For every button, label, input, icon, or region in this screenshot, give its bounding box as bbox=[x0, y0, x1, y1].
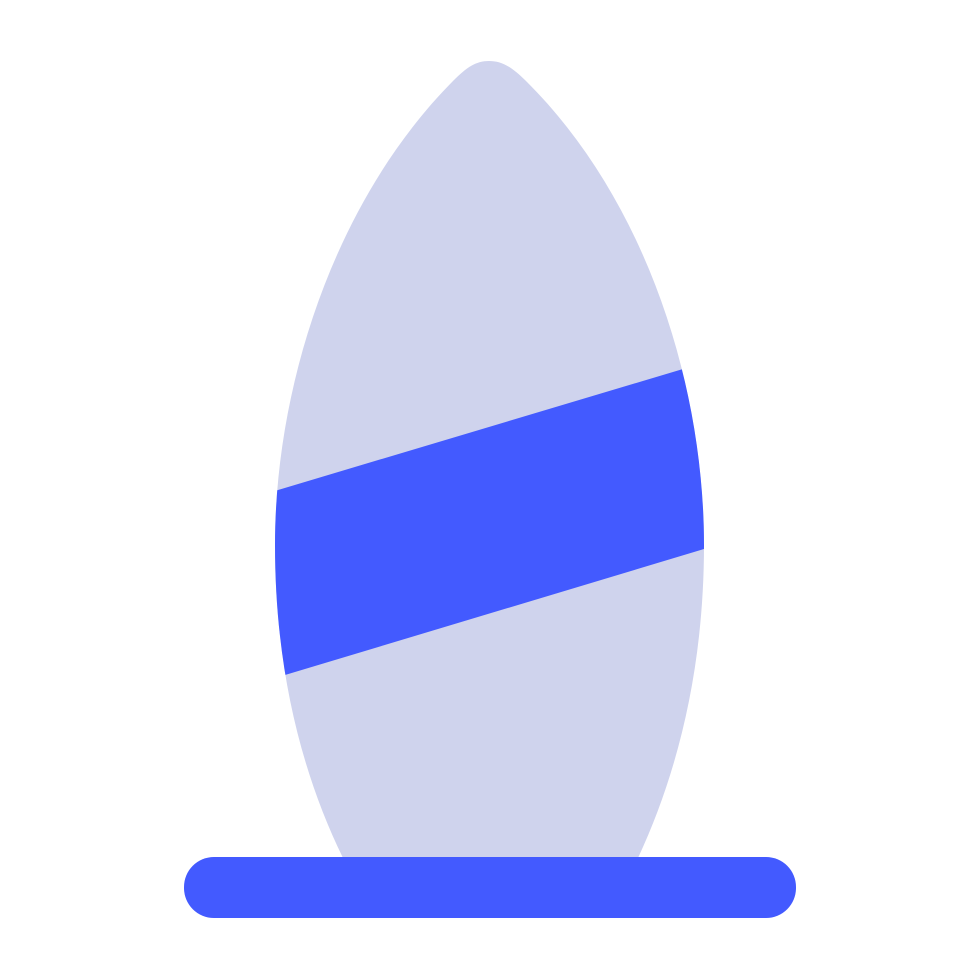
surfboard stripe bbox=[268, 360, 720, 680]
surfboard body bbox=[275, 61, 704, 858]
icon: surfboard bbox=[184, 61, 796, 918]
ground bar bbox=[184, 857, 796, 918]
